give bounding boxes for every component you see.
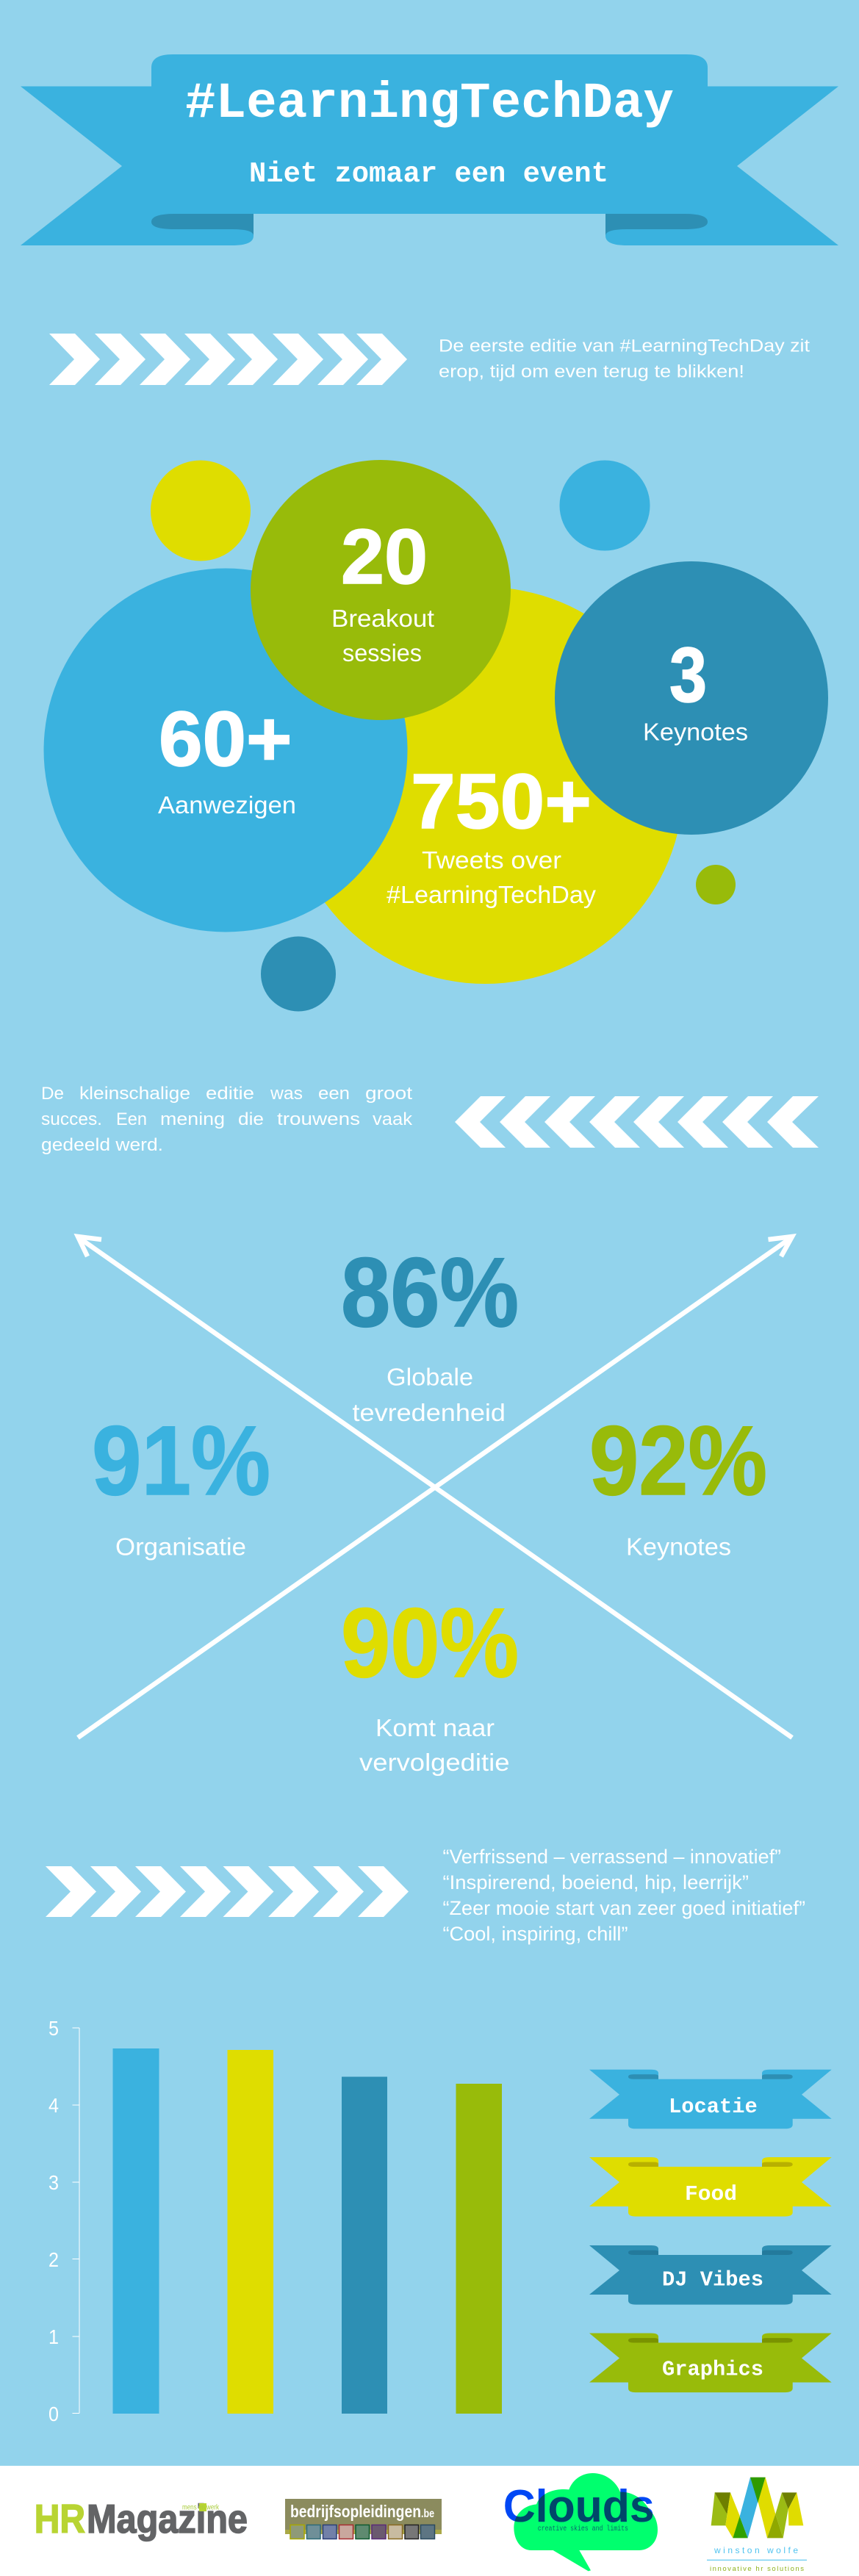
tweets label: #LearningTechDay bbox=[387, 881, 597, 908]
bubble: breakout sessions bbox=[251, 460, 511, 720]
tweets label: Tweets over bbox=[422, 846, 561, 874]
stat: next edition bbox=[341, 1589, 519, 1776]
legend ribbon: Graphics: Graphics bbox=[662, 2357, 763, 2382]
success text bbox=[41, 1084, 413, 1155]
stat: overall satisfaction bbox=[341, 1238, 519, 1426]
quotes: “Cool, inspiring, chill” bbox=[442, 1923, 628, 1945]
logo: HR Magazine bbox=[35, 2496, 248, 2541]
bubble: keynotes: 3 bbox=[669, 632, 707, 719]
intro text bbox=[439, 337, 810, 382]
quotes bbox=[442, 1846, 805, 1945]
legend ribbon: Locatie: Locatie bbox=[669, 2095, 758, 2119]
logo: HR Magazine: mens en werk bbox=[182, 2504, 220, 2512]
success text: groot bbox=[365, 1084, 412, 1104]
legend ribbon: Locatie bbox=[589, 2070, 832, 2129]
bubble: breakout sessions: Breakout bbox=[331, 605, 434, 632]
y axis: 0 bbox=[48, 2403, 59, 2425]
bubble: breakout sessions: 20 bbox=[341, 514, 428, 600]
stat: next edition: Komt naar bbox=[375, 1714, 495, 1741]
small decorative bubbles bbox=[151, 460, 736, 1011]
title banner bbox=[21, 54, 838, 245]
stat: organisation: 91% bbox=[92, 1406, 270, 1516]
intro text: De eerste editie van #LearningTechDay zit bbox=[439, 337, 810, 356]
logo: HR Magazine: Magazine bbox=[87, 2496, 248, 2541]
y axis: 3 bbox=[48, 2171, 59, 2194]
title banner: Niet zomaar een event bbox=[249, 158, 608, 190]
y axis bbox=[48, 2017, 79, 2425]
success text: kleinschalige bbox=[79, 1084, 190, 1104]
success text: De bbox=[41, 1084, 64, 1104]
legend ribbon: Graphics bbox=[589, 2334, 832, 2392]
success text: editie bbox=[206, 1084, 254, 1104]
success text: gedeeld werd. bbox=[41, 1135, 163, 1155]
success text: die bbox=[238, 1109, 264, 1129]
bubble: attendees bbox=[44, 569, 407, 932]
stat: organisation bbox=[92, 1406, 270, 1561]
title banner: #LearningTechDay bbox=[185, 75, 674, 132]
stat: next edition: vervolgeditie bbox=[359, 1749, 510, 1776]
y axis: 5 bbox=[48, 2017, 59, 2040]
stat: keynotes bbox=[589, 1406, 767, 1561]
logo: Clouds: Clouds bbox=[503, 2481, 655, 2532]
tweets label bbox=[387, 758, 597, 908]
bubble: keynotes: Keynotes bbox=[643, 719, 748, 745]
chevron arrows right 1 bbox=[49, 334, 407, 385]
bubble: breakout sessions: sessies bbox=[342, 639, 422, 666]
legend ribbon: DJ Vibes bbox=[589, 2245, 832, 2305]
footer: sponsors band bbox=[0, 2466, 859, 2576]
crossed arrows bbox=[78, 1237, 792, 1738]
quotes: “Verfrissend – verrassend – innovatief” bbox=[442, 1846, 781, 1868]
success text: Een bbox=[116, 1109, 147, 1129]
logo: winston wolfe: innovative hr solutions bbox=[710, 2565, 804, 2573]
bars bbox=[113, 2048, 502, 2414]
legend ribbon: Food: Food bbox=[685, 2182, 737, 2206]
bubble: attendees: 60+ bbox=[159, 696, 292, 782]
y axis: 2 bbox=[48, 2248, 59, 2271]
y axis: 1 bbox=[48, 2325, 59, 2348]
quotes: “Inspirerend, boeiend, hip, leerrijk” bbox=[442, 1871, 749, 1893]
bubble: keynotes bbox=[555, 561, 828, 835]
y axis: 4 bbox=[48, 2094, 59, 2117]
stat: next edition: 90% bbox=[341, 1589, 519, 1698]
logo: HR Magazine: HR bbox=[35, 2496, 85, 2541]
success text: mening bbox=[160, 1109, 225, 1129]
logo: Clouds: creative skies and limits bbox=[538, 2525, 628, 2533]
stat: keynotes: 92% bbox=[589, 1406, 767, 1516]
tweets label: 750+ bbox=[411, 758, 592, 845]
stat: overall satisfaction: 86% bbox=[341, 1238, 519, 1348]
success text: trouwens bbox=[277, 1109, 360, 1129]
legend ribbon: DJ Vibes: DJ Vibes bbox=[662, 2268, 763, 2292]
bubble chart: event figures bbox=[44, 460, 828, 1011]
logo: bedrijfsopleidingen.be: bedrijfsopleidingen bbox=[290, 2502, 421, 2521]
stat: keynotes: Keynotes bbox=[626, 1533, 731, 1561]
logo: bedrijfsopleidingen.be bbox=[285, 2499, 442, 2539]
legend ribbon: Food bbox=[589, 2157, 832, 2217]
logo: Clouds: Clouds bbox=[503, 2481, 655, 2532]
bar chart bbox=[48, 2017, 502, 2425]
logo: winston wolfe bbox=[707, 2478, 807, 2573]
chevron arrows left bbox=[455, 1096, 819, 1148]
quotes: “Zeer mooie start van zeer goed initiatief” bbox=[442, 1897, 805, 1919]
stat: overall satisfaction: Globale bbox=[387, 1364, 473, 1390]
success text: succes. bbox=[41, 1109, 102, 1129]
logo: Clouds bbox=[503, 2473, 658, 2571]
stat: overall satisfaction: tevredenheid bbox=[353, 1399, 506, 1426]
success text: was bbox=[270, 1084, 303, 1104]
stat: organisation: Organisatie bbox=[115, 1533, 246, 1561]
intro text: erop, tijd om even terug te blikken! bbox=[439, 362, 744, 382]
bubble: attendees: Aanwezigen bbox=[158, 791, 296, 819]
success text: vaak bbox=[373, 1109, 413, 1129]
chevron arrows right 2 bbox=[46, 1866, 409, 1917]
bubble: tweets bbox=[287, 587, 683, 984]
success text: een bbox=[318, 1084, 350, 1104]
logo: winston wolfe: winston wolfe bbox=[714, 2545, 798, 2555]
logo: bedrijfsopleidingen.be: .be bbox=[421, 2508, 434, 2520]
